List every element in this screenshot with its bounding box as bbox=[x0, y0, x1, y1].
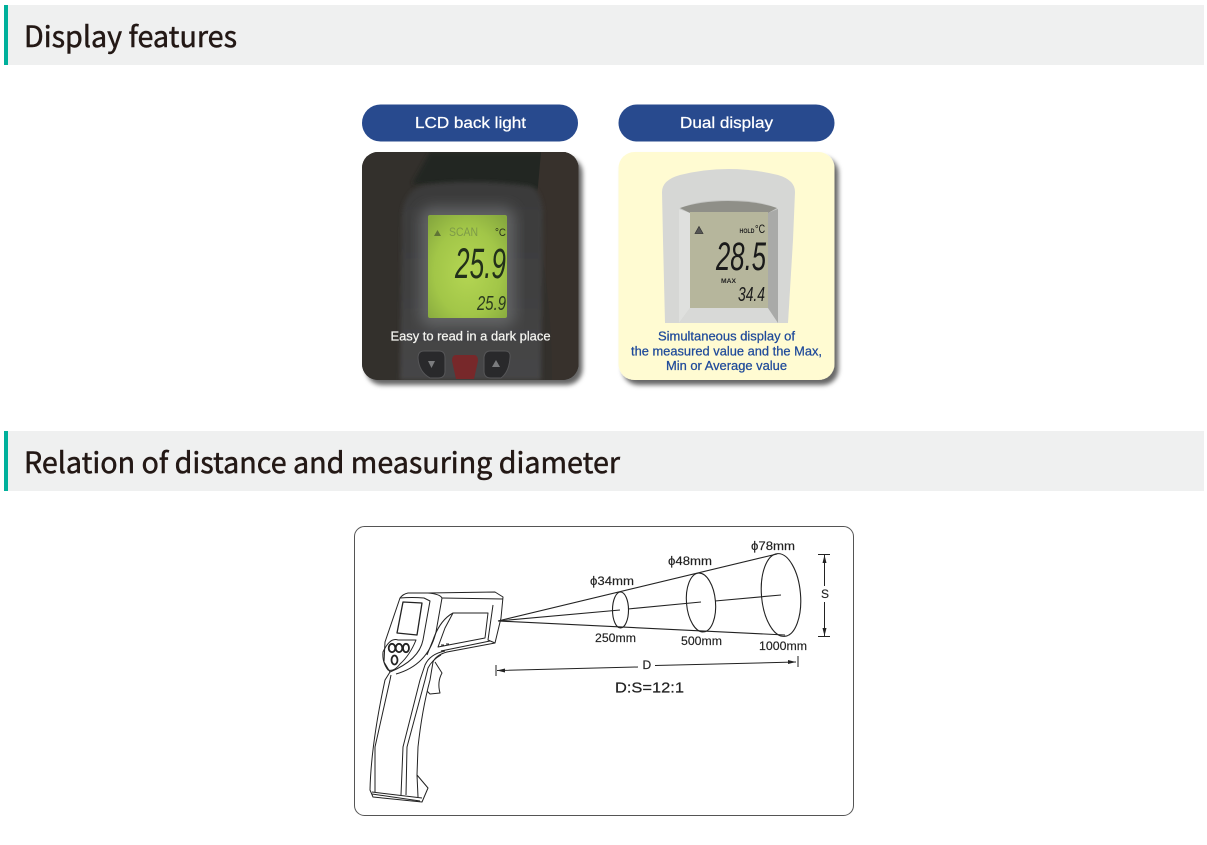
back-lit LCD screen: 25.9 bbox=[476, 293, 506, 315]
dimension arrow: S bbox=[818, 554, 830, 636]
dual LCD screen: MAX bbox=[721, 278, 737, 285]
heading bar: Display features bbox=[4, 5, 1204, 65]
labels: distances: 250mm bbox=[595, 631, 636, 645]
dual LCD screen: 34.4 bbox=[738, 284, 765, 306]
pill label: Dual display bbox=[618, 104, 834, 142]
caption: dual display bbox=[631, 330, 822, 373]
pill label: LCD back light bbox=[362, 104, 578, 142]
caption: dual display: Simultaneous display of bbox=[658, 330, 796, 344]
heading bar: Relation of distance and measuring diameter: Relation of distance and measuring diameter bbox=[24, 440, 621, 482]
labels: distances: 500mm bbox=[681, 634, 722, 648]
labels: spot diameters: ϕ78mm bbox=[751, 539, 795, 553]
labels: spot diameters: ϕ48mm bbox=[668, 554, 712, 568]
heading bar: Display features: Display features bbox=[24, 14, 237, 56]
dimension arrow: S: S bbox=[821, 587, 829, 601]
diagram panel: distance and measuring diameter bbox=[354, 526, 854, 816]
caption: dual display: Min or Average value bbox=[666, 359, 787, 373]
panel: LCD back light photo bbox=[362, 152, 579, 380]
back-lit LCD screen: 25.9 bbox=[454, 240, 506, 288]
back-lit LCD screen: °C bbox=[495, 227, 506, 239]
icon: thermometer gun line drawing bbox=[370, 592, 503, 802]
dimension arrow: D bbox=[496, 656, 798, 676]
labels: distances bbox=[595, 631, 807, 653]
ratio label: D:S=12:1 bbox=[615, 680, 684, 696]
cone: measuring beam and spot ellipses bbox=[498, 552, 804, 638]
panel: LCD back light photo: Easy to read in a dark place bbox=[390, 330, 551, 344]
dual LCD screen: 28.5 bbox=[715, 235, 766, 279]
labels: distances: 1000mm bbox=[759, 639, 807, 653]
dual LCD screen: HOLD bbox=[740, 228, 755, 235]
caption: dual display: the measured value and the Max, bbox=[631, 344, 822, 358]
heading bar: Relation of distance and measuring diameter bbox=[4, 431, 1204, 491]
pill label: Dual display: Dual display bbox=[680, 115, 773, 132]
labels: spot diameters: ϕ34mm bbox=[590, 574, 634, 588]
back-lit LCD screen: SCAN bbox=[449, 225, 478, 239]
dual LCD screen bbox=[690, 212, 768, 308]
gun buttons bbox=[418, 351, 510, 379]
pill label: LCD back light: LCD back light bbox=[415, 115, 527, 132]
labels: spot diameters bbox=[590, 539, 795, 588]
dual LCD screen: °C bbox=[755, 222, 765, 236]
dimension arrow: D: D bbox=[642, 658, 652, 672]
panel: Dual display photo bbox=[618, 152, 834, 380]
back-lit LCD screen bbox=[428, 215, 507, 318]
